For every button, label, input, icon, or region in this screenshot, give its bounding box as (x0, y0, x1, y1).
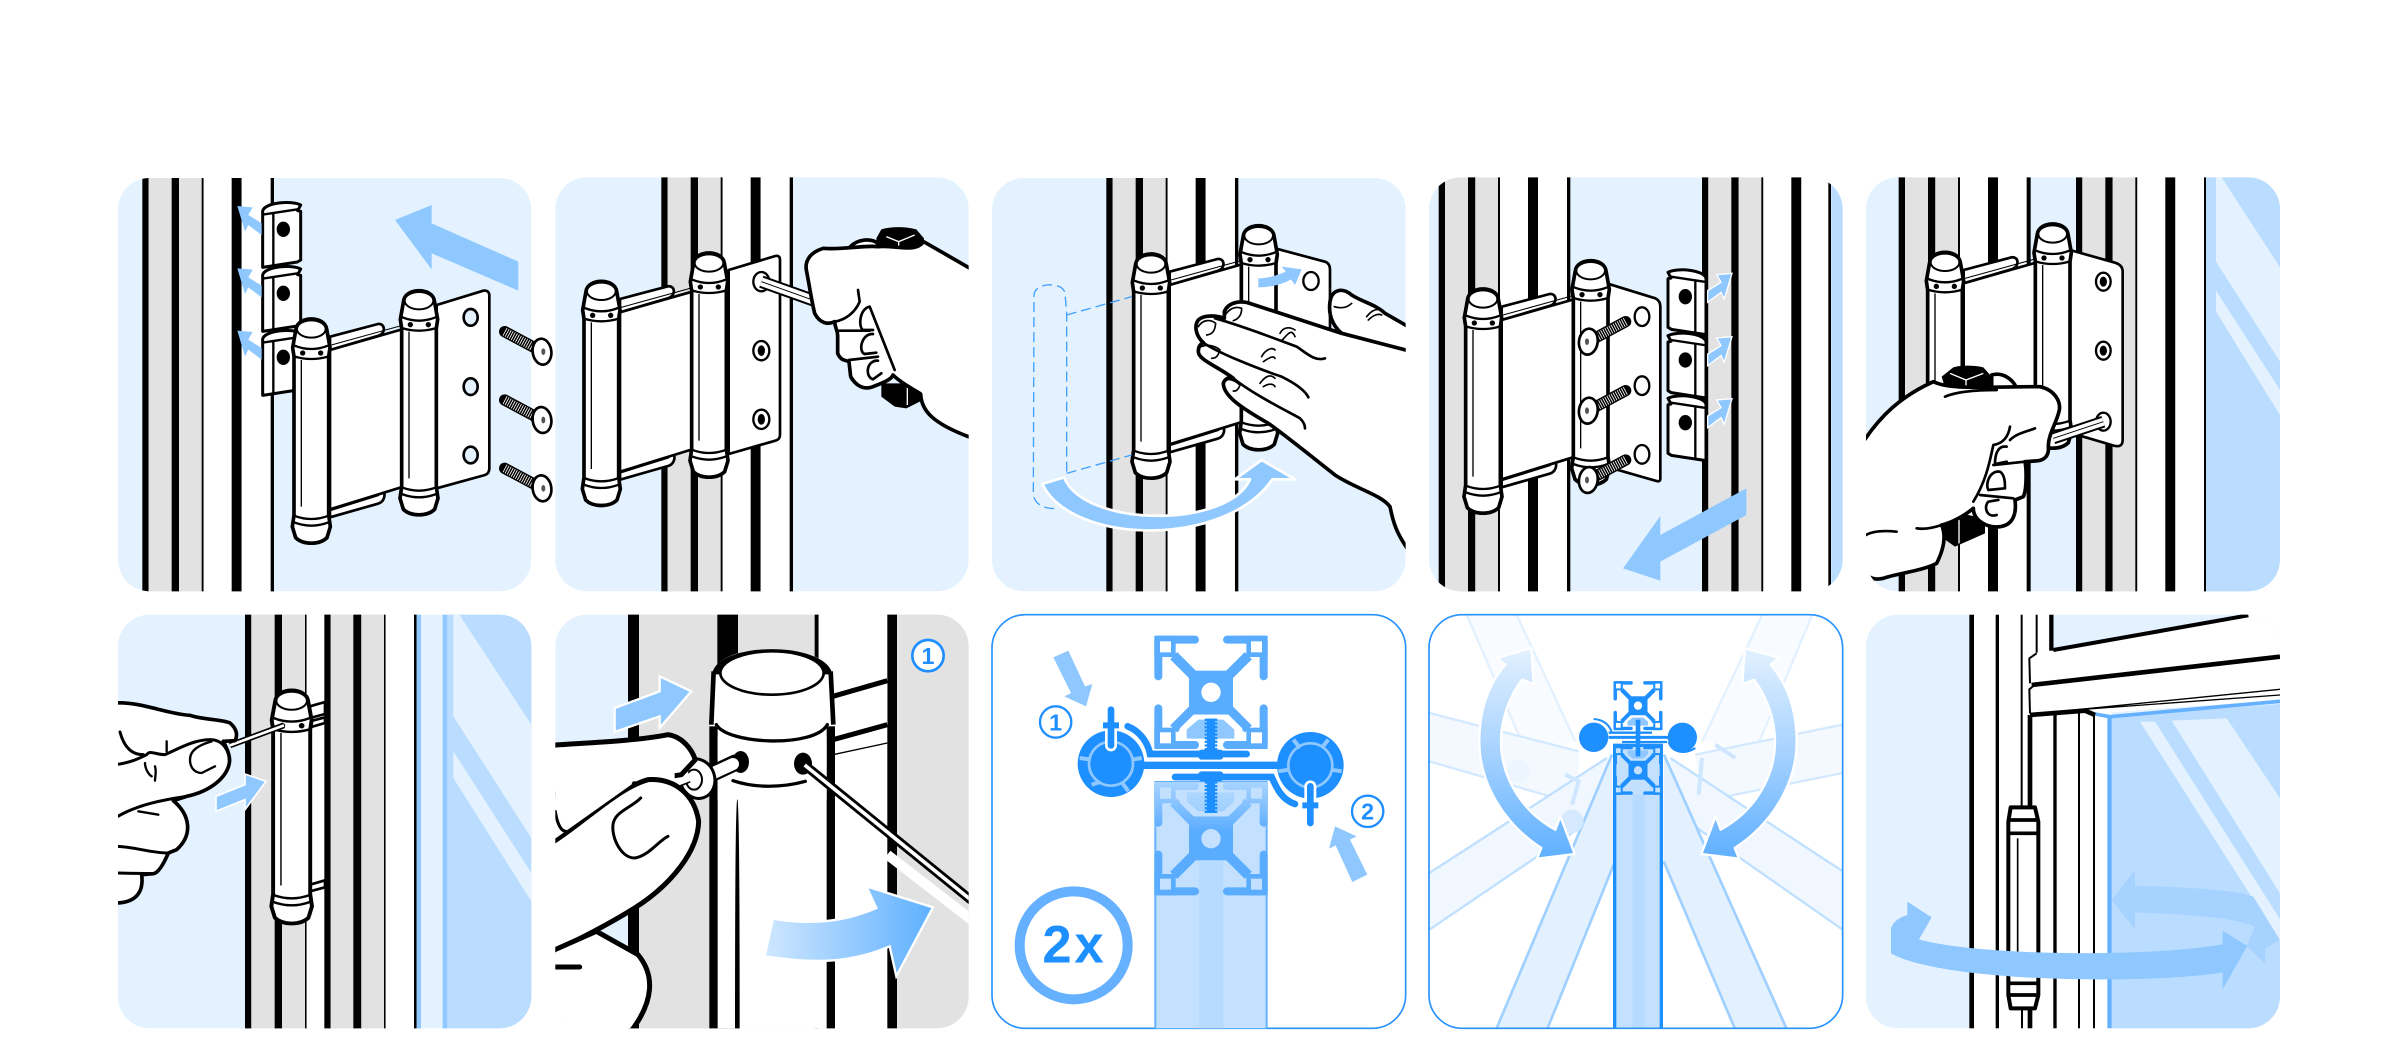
arrow: rear swing (2112, 870, 2280, 963)
icon: hand (1196, 290, 1408, 550)
hinge barrel (2008, 807, 2038, 1008)
icon: large swing arrow (1042, 460, 1295, 530)
badge: 2: 2 (1361, 799, 1374, 825)
panel 2: tighten hinge with hex key (556, 177, 969, 592)
badge: 1: 1 (1049, 709, 1062, 735)
icon: small arrows (1708, 273, 1732, 428)
icon: pushing arrow (615, 676, 691, 732)
panel 3: swing hinge leaf by hand (992, 178, 1406, 592)
panel 3 artwork (992, 178, 1406, 592)
icon: small curved arrow (1258, 267, 1302, 287)
icon: slot nuts (1668, 270, 1706, 461)
barrel body (710, 649, 819, 1028)
panel 1 artwork (118, 178, 532, 592)
upper profile (1614, 681, 1662, 730)
panel 1: remove hinge and slot nuts (118, 178, 553, 592)
badge: step 1: 1 (922, 643, 935, 669)
panel 4 artwork (1429, 177, 1843, 592)
icon: gradient rotation arrow (765, 886, 933, 976)
panel 9: door swing range cross section (1429, 615, 1843, 1032)
left barrel (1078, 710, 1144, 797)
ghost door positions (1429, 615, 1843, 1030)
badge: 1 (1040, 706, 1071, 738)
panel 10: finished door swinging on hinge (1866, 615, 2280, 1035)
icon: dashed ghost of hinge (1033, 285, 1132, 509)
panel 6 artwork (115, 608, 534, 1041)
panel 7 artwork (551, 608, 975, 1041)
icon: hand (551, 735, 699, 1033)
icon: fingers (115, 703, 237, 903)
panel 8 artwork (992, 615, 1406, 1030)
panel 6: insert pin into barrel (115, 608, 534, 1041)
arrow 1 (1053, 651, 1092, 706)
icon: pin with washer (668, 754, 735, 803)
arrow: left swing (1479, 648, 1575, 859)
right barrel (1277, 732, 1344, 823)
icon: screws (505, 332, 553, 503)
panel 5: tighten final screw with hex key (1866, 177, 2280, 592)
panel 2 artwork (556, 177, 969, 592)
bottom profile (1154, 782, 1268, 895)
hinge plate and leaves (1128, 726, 1295, 804)
clamp bolts (1198, 719, 1223, 813)
top profile (1154, 636, 1268, 749)
panel 8: cross section with two adjusting screws (992, 615, 1406, 1030)
icon: hex key (803, 764, 975, 920)
panel 5 artwork (1866, 177, 2280, 592)
badge: 2x: 2x (1042, 916, 1106, 975)
panel 9 artwork (1429, 615, 1843, 1032)
panel 7: detail of pin adjustment at barrel (551, 608, 975, 1041)
panel 10 artwork (1866, 615, 2280, 1035)
icon: hand (1863, 382, 2060, 579)
hinge centre (1579, 719, 1697, 756)
centre door (1615, 745, 1661, 1032)
arrow: front swing (1891, 902, 2247, 989)
window glass (2095, 701, 2280, 1028)
badge: step 1 (912, 640, 944, 671)
arrow: right swing (1701, 648, 1797, 859)
lower profile (1614, 746, 1662, 795)
icon: hex pin (230, 725, 284, 745)
arrow 2 (1329, 826, 1367, 882)
badge: 2 (1352, 796, 1383, 827)
icon: direction arrow (216, 774, 266, 811)
frame lines (1972, 615, 2280, 1028)
panel 4: insert screws and attach hinge to nuts (1429, 177, 1843, 592)
badge: 2x (1020, 891, 1128, 999)
